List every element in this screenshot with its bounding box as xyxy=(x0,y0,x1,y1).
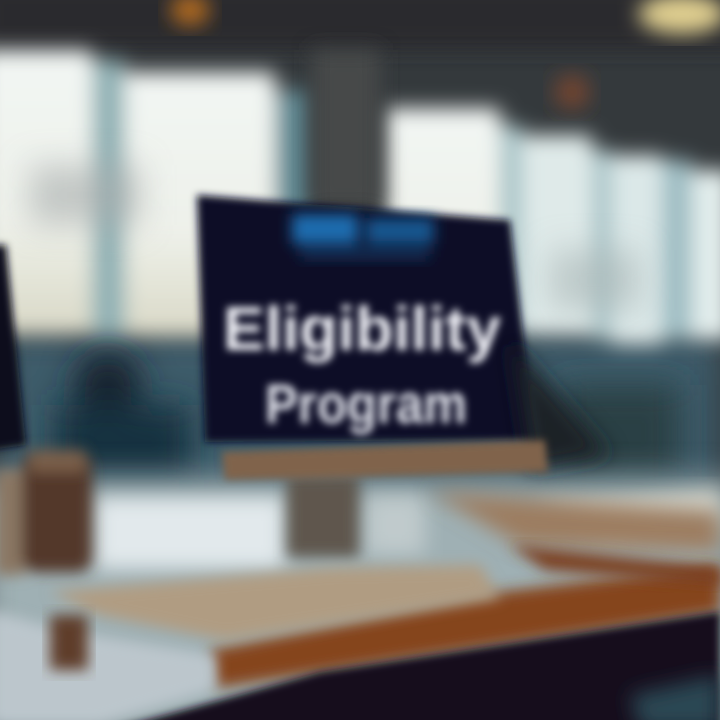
distant dark seats xyxy=(55,351,680,480)
floor beyond the table xyxy=(630,675,720,720)
monitor screen xyxy=(197,195,610,470)
coffee cup xyxy=(0,450,92,575)
left dark monitor edge xyxy=(0,245,26,450)
ceiling lights xyxy=(170,0,720,110)
bright windows xyxy=(0,50,720,345)
monitor stand neck xyxy=(287,475,359,557)
desk surface xyxy=(0,480,720,720)
monitor wooden base bar xyxy=(222,440,548,480)
screen title line one: Eligibility xyxy=(223,295,502,364)
table wood edge xyxy=(210,565,720,688)
screen title line two: Program xyxy=(265,372,467,435)
window haze at the horizon xyxy=(30,165,640,310)
far right wooden tray xyxy=(430,492,720,552)
white lower-left desk area xyxy=(0,610,215,720)
cup saucer stem xyxy=(50,615,88,670)
dark table underside xyxy=(95,612,720,720)
central pillar xyxy=(312,50,380,210)
open book on the desk xyxy=(50,565,500,640)
screen heading blurred blue text xyxy=(292,214,434,258)
